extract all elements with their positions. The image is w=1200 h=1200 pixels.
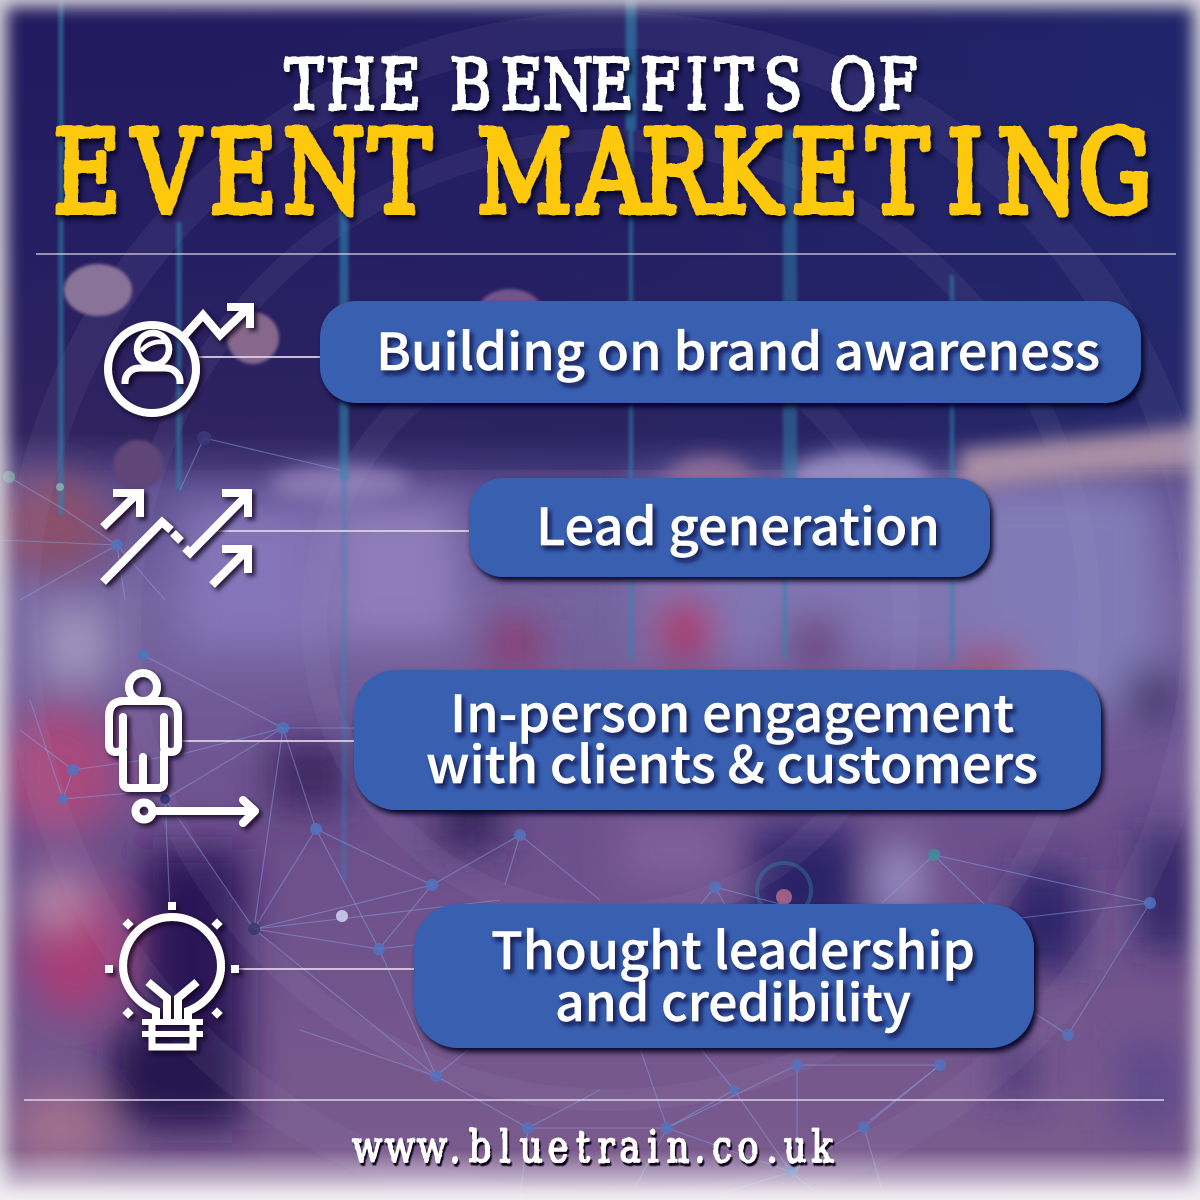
- icon: person with rising arrow: [108, 307, 250, 413]
- panel: lead generation: [469, 478, 990, 577]
- panel: thought leadership: and credibility: [555, 962, 911, 1036]
- panel: building on brand awareness: [320, 301, 1141, 403]
- footer url: www.bluetrain.co.uk: [352, 1122, 833, 1173]
- icon: trend arrows: [103, 493, 248, 585]
- network lines: [0, 438, 1150, 1200]
- panel: thought leadership: Thought leadership: [491, 910, 975, 984]
- connector lines: [182, 357, 472, 969]
- bottom divider: [24, 1099, 1164, 1101]
- heading: event marketing: EVENT MARKETING: [53, 106, 1152, 239]
- panel: in-person engagement: [354, 670, 1101, 810]
- heading: the benefits of: THE BENEFITS OF: [285, 46, 918, 126]
- panel: lead generation: Lead generation: [536, 486, 940, 560]
- top divider: [36, 253, 1176, 255]
- panel: building on brand awareness: Building on brand awareness: [376, 311, 1100, 385]
- panel: in-person engagement: In-person engagement: [450, 673, 1014, 747]
- panel: thought leadership: [414, 904, 1034, 1048]
- icon: light bulb: [105, 902, 239, 1047]
- bokeh spots: [64, 264, 544, 490]
- icon: person with arrow: [109, 673, 255, 823]
- title: [53, 46, 1152, 239]
- panel: in-person engagement: with clients & customers: [426, 724, 1038, 798]
